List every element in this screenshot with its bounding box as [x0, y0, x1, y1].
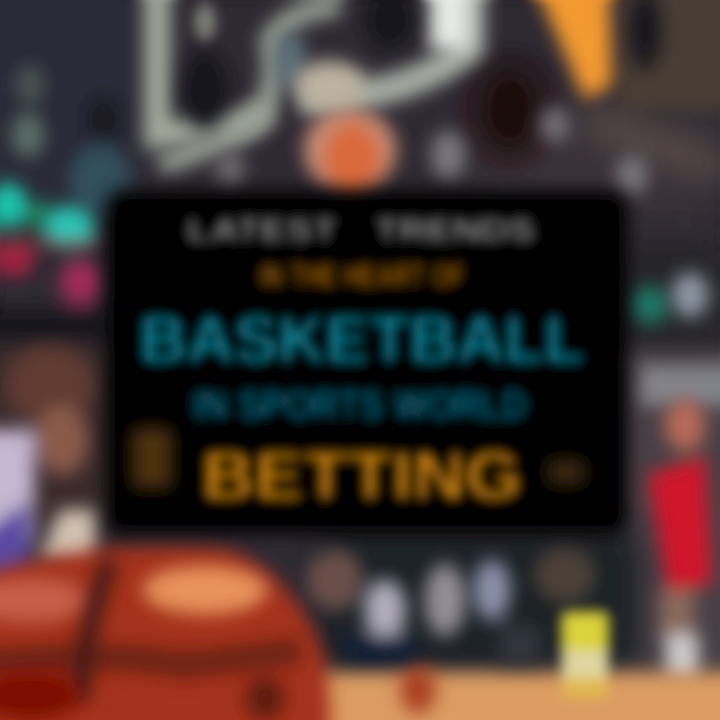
orange beam — [525, 0, 720, 168]
small basketball above the panel — [304, 108, 396, 194]
left player — [0, 345, 95, 590]
yellow object on the sideline — [562, 612, 608, 698]
orange subtitle: IN THE HEART OF — [260, 257, 464, 294]
backboard and hoop — [157, 0, 548, 165]
kicker line: LATEST — [187, 212, 338, 248]
amber side ornaments — [132, 428, 584, 488]
wooden court floor — [330, 666, 720, 720]
large foreground basketball — [0, 560, 310, 720]
kicker line — [187, 212, 535, 248]
arena lights — [12, 65, 648, 215]
dark title panel — [106, 190, 628, 534]
amber highlight: BETTING — [202, 438, 522, 514]
teal heading: BASKETBALL — [140, 302, 584, 376]
title text block — [140, 212, 584, 514]
crowd — [307, 547, 595, 665]
teal second line: IN SPORTS WORLD — [192, 381, 528, 428]
right player in red — [648, 399, 712, 680]
kicker line: TRENDS — [375, 212, 535, 248]
right scoreboard lights — [632, 273, 720, 386]
left scoreboard lights — [0, 183, 110, 340]
